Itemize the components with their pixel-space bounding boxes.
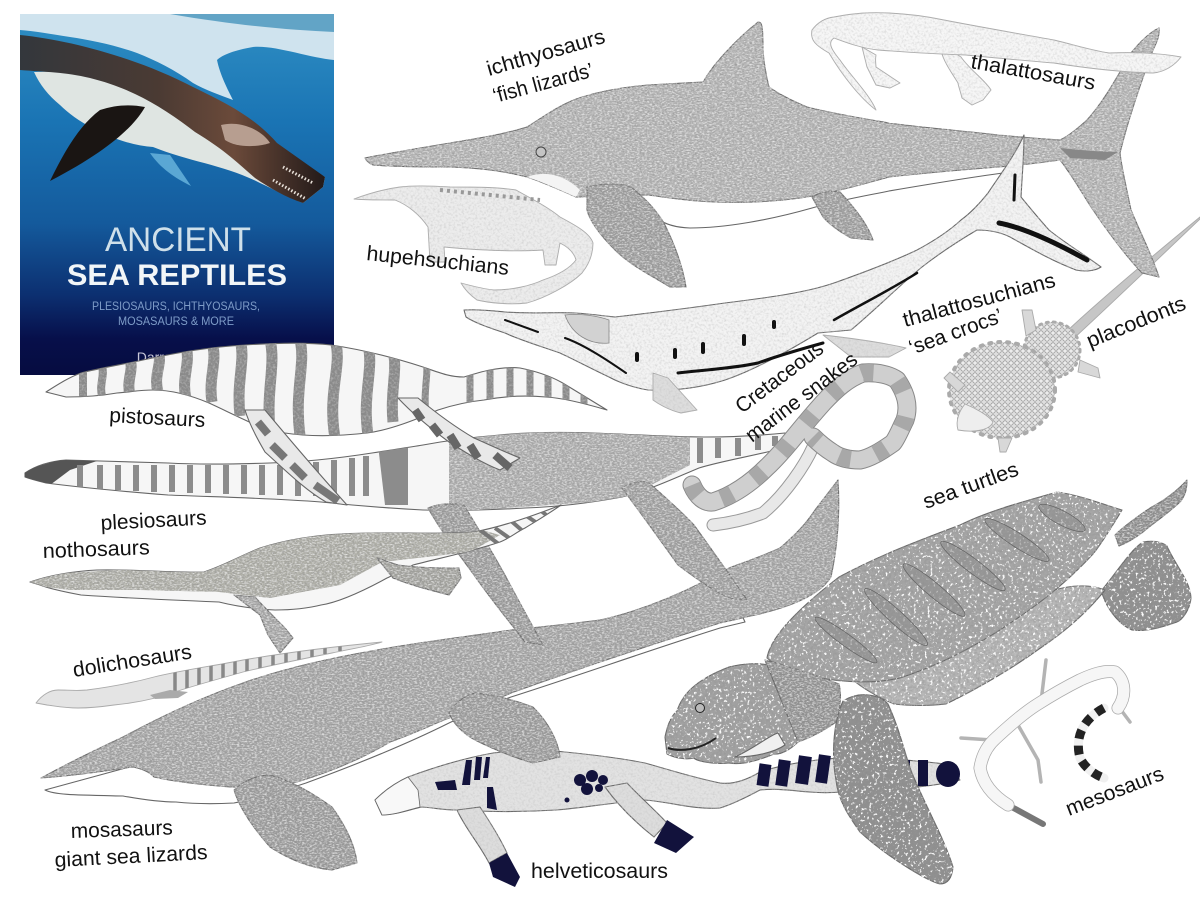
cover: head patch <box>221 124 270 146</box>
label: dolichosaurs: dolichosaurs <box>71 640 193 682</box>
mosasaur belly <box>45 600 745 804</box>
pistosaur <box>46 340 607 505</box>
turtle mouth <box>668 738 716 750</box>
snake body outline <box>692 373 907 502</box>
turtle rear flipper <box>1101 541 1191 631</box>
thalattosaur <box>812 13 1181 110</box>
label: ichthyosaurs: ichthyosaurs <box>484 25 608 81</box>
turtle underside <box>853 586 1105 706</box>
mesosaur snout <box>1008 805 1043 824</box>
helveticosaur blue markings <box>435 754 960 810</box>
hupehsuchian <box>354 186 593 304</box>
placodont rear shell <box>1024 322 1080 378</box>
nothosaur back <box>30 528 500 598</box>
cover: teeth <box>273 167 313 199</box>
turtle shell ridges <box>812 500 1088 667</box>
croc head patch <box>565 314 609 343</box>
turtle eye <box>696 704 704 712</box>
label: helveticosaurs: helveticosaurs <box>531 860 668 883</box>
pistosaur rear flipper <box>398 398 520 470</box>
label: sea turtles: sea turtles <box>920 458 1022 514</box>
ichthyosaur rear flipper <box>812 191 873 240</box>
Cretaceous marine snake <box>692 373 907 525</box>
turtle tail <box>1115 480 1187 546</box>
label: mesosaurs right: mesosaurs <box>1063 762 1167 821</box>
pistosaur front flipper bands <box>258 422 338 501</box>
mosasaur rear flipper <box>449 693 560 763</box>
croc dark markings <box>505 175 1087 373</box>
dolichosaur <box>36 642 382 708</box>
label: fish lizards: ‘fish lizards’ <box>490 59 596 108</box>
helveticosaur rear leg <box>605 783 667 837</box>
croc body <box>464 135 1101 390</box>
croc front flipper <box>653 373 697 413</box>
label: marine snakes: marine snakes <box>741 348 862 447</box>
placodont head <box>957 404 993 431</box>
label: plesiosaurs: plesiosaurs <box>100 506 207 535</box>
croc rear flipper <box>823 335 906 357</box>
plesiosaur dark head <box>25 460 96 484</box>
ichthyosaur throat patch <box>527 174 580 197</box>
ichthyosaur belly <box>640 160 1010 228</box>
plesiosaur grey flank <box>449 430 690 512</box>
label: giant sea lizards: giant sea lizards <box>54 841 208 872</box>
label: hupehsuchians: hupehsuchians <box>365 242 510 280</box>
cover: front flipper <box>50 105 145 181</box>
thalattosaur front leg <box>862 47 900 88</box>
placodont <box>944 217 1200 452</box>
snake bands <box>692 373 907 502</box>
cover: title second line: SEA REPTILES <box>67 259 287 292</box>
plesiosaur <box>25 430 795 645</box>
nothosaur <box>30 505 561 653</box>
plesiosaur grey back and stripes <box>25 430 775 512</box>
thalattosaur body <box>812 13 1181 110</box>
helveticosaur front leg <box>457 807 507 863</box>
turtle head <box>665 664 798 764</box>
placodont carapace <box>949 342 1055 438</box>
cover: sea surface foam <box>20 14 334 100</box>
plesiosaur front flipper <box>428 504 543 645</box>
label: nothosaurs: nothosaurs <box>42 536 150 563</box>
turtle shell <box>767 492 1122 682</box>
helveticosaur rear foot <box>654 820 694 853</box>
label: thalattosaurs: thalattosaurs <box>969 50 1097 95</box>
mesosaur tail stripes <box>1078 708 1104 778</box>
dolichosaur leg <box>150 690 188 699</box>
placodont tail <box>1066 217 1200 340</box>
hupehsuchian body <box>354 186 593 304</box>
cover: subtitle second line: MOSASAURS & MORE <box>118 316 234 328</box>
cover: surface streaks <box>170 14 334 32</box>
ichthyosaur body <box>365 22 1159 277</box>
nothosaur front leg <box>234 595 293 653</box>
dolichosaur stripes <box>173 646 342 691</box>
snake body fill <box>692 373 907 502</box>
turtle cheek <box>735 733 785 757</box>
sea turtle <box>665 480 1191 884</box>
mosasaur body <box>41 480 839 787</box>
book cover: Ancient Sea Reptiles <box>20 14 334 375</box>
cover: rear flipper <box>150 153 191 186</box>
ichthyosaur <box>365 22 1159 287</box>
mosasaur <box>41 480 839 870</box>
nothosaur tail stripes <box>480 510 550 545</box>
turtle front flipper <box>834 695 953 884</box>
mesosaur <box>961 660 1130 824</box>
snake second coil outline <box>713 447 813 525</box>
label: mosasaurs: mosasaurs <box>70 816 173 843</box>
helveticosaur body <box>375 751 960 815</box>
dolichosaur body <box>36 642 382 708</box>
thalattosuchian sea croc <box>464 135 1101 413</box>
plesiosaur dark shoulder patch <box>378 448 408 505</box>
cover: subtitle: PLESIOSAURS, ICHTHYOSAURS, <box>92 301 260 313</box>
cover: author: Darren Naish <box>137 349 219 365</box>
pistosaur front flipper <box>245 410 347 505</box>
ichthyosaur tail ridge <box>1060 148 1118 160</box>
mesosaur tail <box>1078 708 1104 778</box>
mesosaur body fill <box>980 671 1124 805</box>
placodont legs <box>944 310 1100 452</box>
label: thalattosuchians: thalattosuchians <box>900 269 1058 332</box>
helveticosaur front foot <box>489 853 520 887</box>
pistosaur body <box>46 343 607 436</box>
snake second coil fill <box>713 447 813 525</box>
cover: plesiosaur belly <box>34 70 325 203</box>
label: Cretaceous: Cretaceous <box>731 337 828 418</box>
plesiosaur rear flipper <box>622 482 747 600</box>
label: sea crocs: ‘sea crocs’ <box>906 305 1006 360</box>
ichthyosaur eye <box>536 147 546 157</box>
pistosaur stripes <box>83 340 584 438</box>
mosasaur front flipper <box>234 775 357 870</box>
cover: title: ANCIENT <box>105 221 251 259</box>
label: pistosaurs: pistosaurs <box>109 404 206 432</box>
nothosaur belly and neck <box>30 505 561 610</box>
plesiosaur neck and body base <box>25 432 795 510</box>
helveticosaur head <box>375 777 420 815</box>
pistosaur rear flipper bands <box>415 410 510 468</box>
thalattosaur rear leg <box>939 43 991 105</box>
helveticosaur <box>375 751 960 887</box>
cover: plesiosaur dark back <box>20 35 325 203</box>
nothosaur rear leg <box>377 558 461 595</box>
turtle neck <box>765 660 840 742</box>
mesosaur body outline <box>980 671 1124 805</box>
label: placodonts: placodonts <box>1083 292 1189 353</box>
hupehsuchian back stripes <box>440 190 540 200</box>
mesosaur limbs <box>961 660 1130 782</box>
ichthyosaur front flipper <box>587 184 686 287</box>
